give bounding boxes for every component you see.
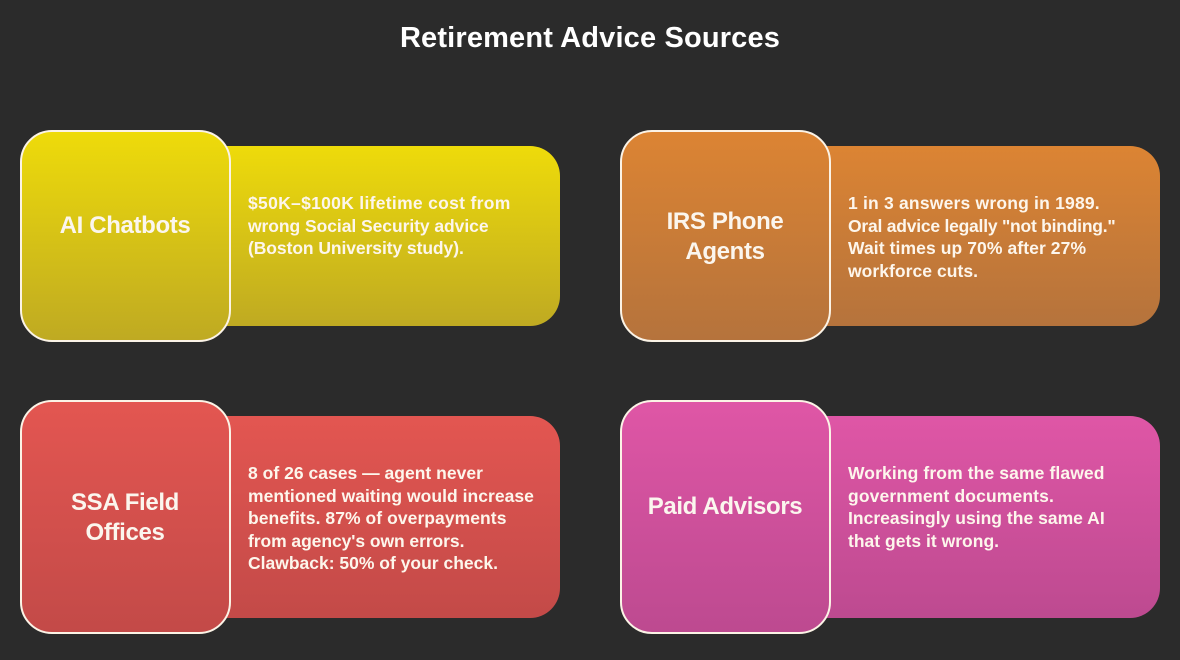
text: AI Chatbots detail: (Boston University study). <box>248 238 464 258</box>
heading box: AI Chatbots <box>20 130 230 342</box>
description panel: Paid Advisors <box>810 416 1160 618</box>
text: IRS Phone Agents detail: Oral advice legally "not binding." <box>848 216 1115 236</box>
panel: SSA Field Offices <box>20 400 560 634</box>
heading box: AI Chatbots: AI Chatbots <box>60 212 190 238</box>
description panel: AI Chatbots <box>210 146 560 326</box>
heading box: SSA Field Offices <box>20 400 230 634</box>
text: AI Chatbots detail: wrong Social Security advice <box>248 216 488 236</box>
text: IRS Phone Agents detail <box>848 193 1115 280</box>
text: IRS Phone Agents detail: workforce cuts. <box>848 260 978 280</box>
text: Paid Advisors detail: Working from the same flawed <box>848 463 1105 483</box>
panel: Paid Advisors <box>620 400 1160 634</box>
text: Paid Advisors detail: government documents. <box>848 486 1054 506</box>
text: SSA Field Offices detail <box>248 463 534 573</box>
heading box: SSA Field Offices: Offices <box>86 519 164 546</box>
text: SSA Field Offices detail: from agency's own errors. <box>248 530 464 550</box>
text: SSA Field Offices detail: benefits. 87% of overpayments <box>248 508 506 528</box>
text: SSA Field Offices detail: Clawback: 50% of your check. <box>248 553 498 573</box>
text: Paid Advisors detail: that gets it wrong. <box>848 530 999 550</box>
heading box: Paid Advisors: Paid Advisors <box>648 492 802 520</box>
text: SSA Field Offices detail: mentioned waiting would increase <box>248 486 534 506</box>
heading box: IRS Phone Agents: Agents <box>685 238 765 265</box>
panel: IRS Phone Agents <box>620 130 1160 342</box>
text: AI Chatbots detail: $50K–$100K lifetime cost from <box>248 193 511 213</box>
description panel: IRS Phone Agents <box>810 146 1160 326</box>
heading box: IRS Phone Agents <box>620 130 830 342</box>
description panel: SSA Field Offices <box>210 416 560 618</box>
text: Paid Advisors detail <box>848 463 1105 550</box>
text: SSA Field Offices detail: 8 of 26 cases — agent never <box>248 463 483 483</box>
title: Retirement Advice Sources <box>400 22 780 54</box>
text: AI Chatbots detail <box>248 193 511 258</box>
panel: AI Chatbots <box>20 130 560 342</box>
text: IRS Phone Agents detail: Wait times up 70% after 27% <box>848 238 1086 258</box>
heading box: Paid Advisors <box>620 400 830 634</box>
heading box: SSA Field Offices: SSA Field <box>71 489 179 516</box>
heading box: IRS Phone Agents: IRS Phone <box>667 208 783 235</box>
text: IRS Phone Agents detail: 1 in 3 answers wrong in 1989. <box>848 193 1100 213</box>
text: Paid Advisors detail: Increasingly using the same AI <box>848 508 1105 528</box>
